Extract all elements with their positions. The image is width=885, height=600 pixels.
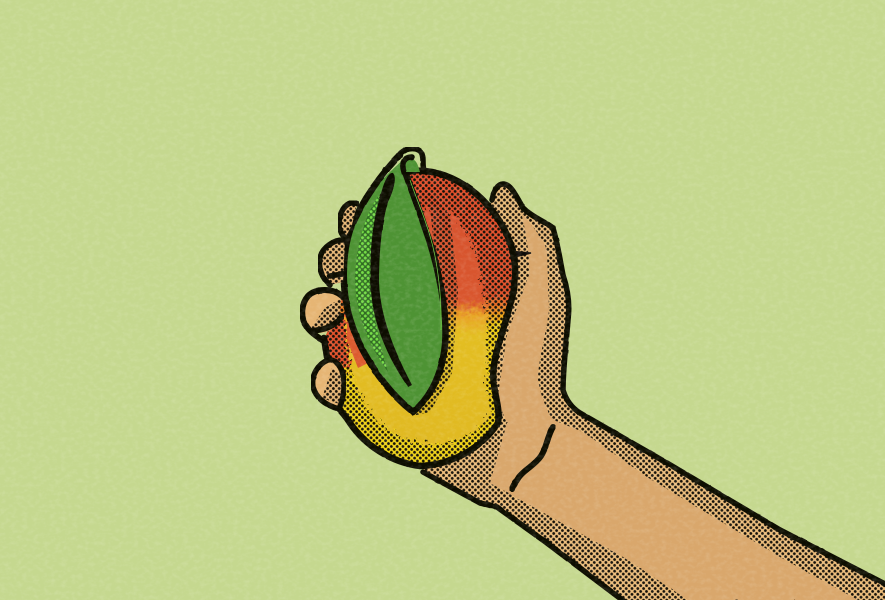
finger 4	[313, 360, 346, 409]
wrist crease	[512, 427, 553, 489]
halftone beside leaf	[412, 190, 458, 416]
mango colour base	[326, 174, 512, 463]
plain skin highlight	[490, 212, 858, 600]
thumb crease	[508, 251, 531, 258]
leaf halftone strip	[355, 190, 388, 372]
arm and hand	[423, 184, 885, 600]
finger 1	[339, 203, 358, 238]
hand and arm fill with halftone	[423, 184, 885, 600]
finger 3	[302, 290, 344, 342]
mango outline	[324, 171, 515, 466]
red patch behind fingers, left of leaf	[326, 308, 352, 374]
leaf stem	[398, 149, 425, 173]
leaf outline	[344, 155, 445, 412]
leaf lime edge	[410, 180, 441, 330]
leaf vein	[370, 173, 412, 387]
leaf fill	[344, 160, 444, 412]
mango	[322, 168, 518, 470]
plain colour band	[345, 206, 491, 444]
mango leaf	[344, 149, 445, 412]
arm outline	[423, 184, 885, 600]
finger 2	[319, 240, 345, 285]
plain red patch beside leaf	[347, 320, 367, 368]
fingers	[302, 203, 358, 409]
